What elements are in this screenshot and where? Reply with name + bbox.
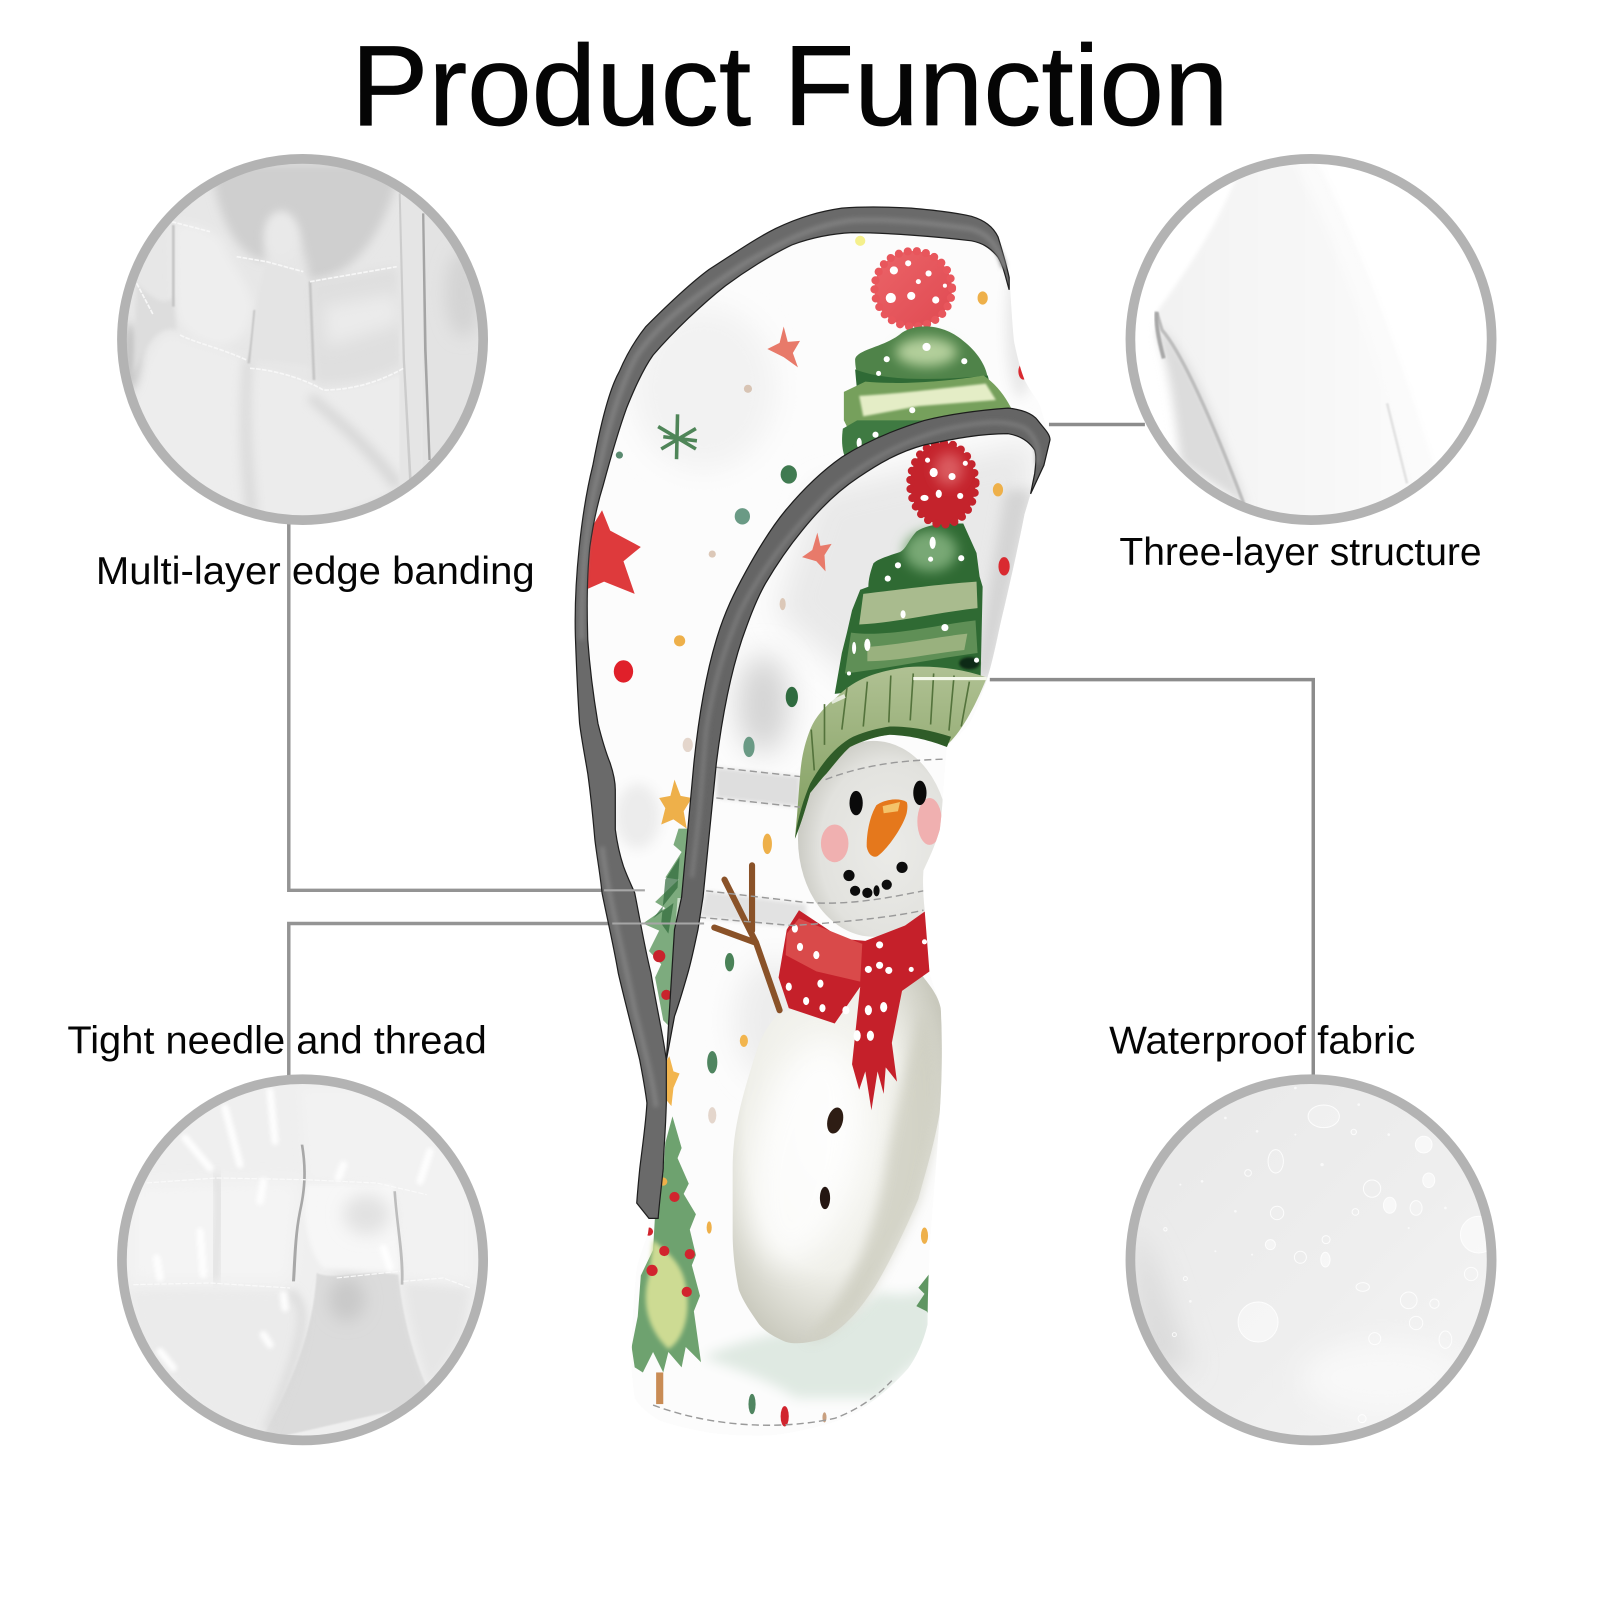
label: tight needle and thread: Tight needle and thread (67, 1020, 487, 1063)
label: waterproof fabric: Waterproof fabric (1109, 1020, 1415, 1063)
dots on front panel (707, 483, 1010, 1427)
front panel white leather (632, 408, 1050, 1436)
icon: snowman buttons (820, 1106, 846, 1209)
back edge binding (575, 207, 1009, 1218)
icon: front pompom (910, 443, 976, 524)
back panel decorations (584, 236, 1035, 1033)
icon: front hat (835, 523, 983, 694)
dots on back panel (614, 236, 1029, 752)
icon: right tree sliver (916, 1274, 929, 1313)
icon: carrot nose (867, 799, 907, 857)
icon: eyes (849, 781, 927, 815)
connector: three-layer structure (1049, 423, 1145, 426)
icon: front coral star (802, 533, 832, 571)
faint connector lines over product (604, 890, 704, 923)
panel: three-layer structure detail (1122, 148, 1505, 531)
connector: multi-layer edge banding (289, 515, 604, 890)
back panel white leather (510, 153, 1122, 1480)
title: Product Function (351, 23, 1229, 150)
icon: back green hat (842, 326, 1012, 461)
panel: tight needle and thread detail (112, 1071, 495, 1454)
icon: small orange star (666, 1056, 680, 1106)
body shading crescent (825, 1024, 940, 1338)
icon: coal mouth (843, 862, 908, 898)
icon: lower christmas tree (632, 1116, 701, 1404)
product: snowman head cover (574, 206, 1051, 1426)
front panel decorations (632, 439, 1036, 1427)
panel: waterproof fabric detail (1122, 1071, 1505, 1454)
label: three-layer structure: Three-layer structure (1119, 531, 1482, 574)
stitches (653, 759, 944, 1425)
icon: cheeks (821, 798, 942, 862)
ring (1130, 1079, 1492, 1440)
icon: twig arm (714, 865, 780, 1010)
icon: snowman body (733, 969, 942, 1343)
ring (1130, 159, 1492, 520)
hat brim dark edge (795, 727, 951, 839)
icon: hat brim (795, 667, 987, 839)
icon: snowman head (798, 741, 949, 937)
connector: tight needle and thread (289, 923, 612, 1080)
label: multi-layer edge banding: Multi-layer edge banding (96, 550, 535, 593)
ring (122, 159, 483, 520)
icon: red star (584, 510, 641, 594)
ring (122, 1079, 483, 1440)
icon: coral star (767, 327, 800, 367)
panel: multi-layer edge banding detail (112, 148, 495, 531)
front edge binding (666, 408, 1050, 1060)
snow ground (703, 1288, 934, 1398)
icon: back pompom (874, 251, 952, 327)
icon: green snowflake (658, 414, 697, 459)
icon: yellow star behind front panel (659, 780, 692, 829)
icon: upper christmas tree (644, 828, 688, 1025)
stitched seam band (716, 767, 800, 807)
water droplets (1164, 1105, 1497, 1423)
icon: red scarf (779, 910, 930, 1110)
highlight streak (913, 677, 987, 680)
connector: waterproof fabric (990, 680, 1313, 1080)
